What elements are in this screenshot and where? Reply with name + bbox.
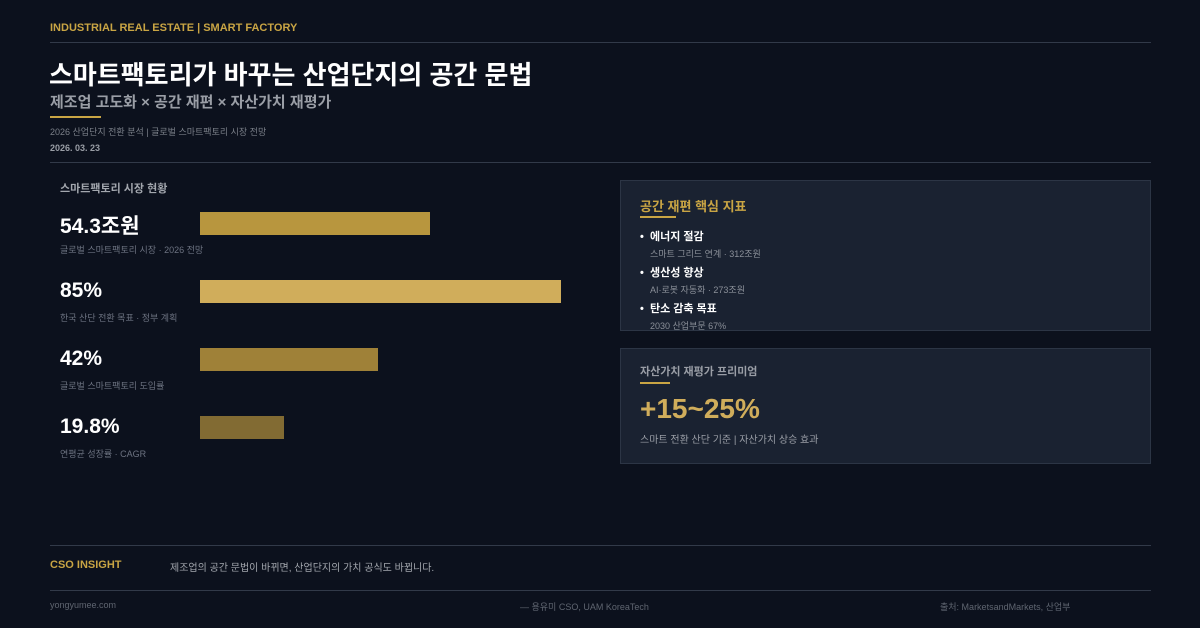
- footer: — 용유미 CSO, UAM KoreaTech: [520, 602, 649, 612]
- metric 2: 한국 산단 전환 목표 · 정부 계획: [60, 313, 177, 323]
- CSO insight: 제조업의 공간 문법이 바뀌면, 산업단지의 가치 공식도 바뀝니다.: [170, 563, 434, 574]
- kicker: INDUSTRIAL REAL ESTATE | SMART FACTORY: [50, 22, 297, 34]
- metric 3: [60, 347, 164, 391]
- metric 2: [60, 279, 177, 323]
- item: carbon: 2030 산업부문 67%: [650, 321, 726, 331]
- metric 1: [60, 215, 203, 255]
- footer: 출처: MarketsandMarkets, 산업부: [940, 602, 1070, 612]
- footer: [50, 600, 1070, 612]
- bar 1: [200, 212, 430, 235]
- item: energy: [640, 230, 761, 259]
- CSO insight: [50, 559, 434, 574]
- title: 스마트팩토리가 바꾸는 산업단지의 공간 문법: [49, 60, 532, 90]
- panel: key indicators: [620, 180, 1151, 331]
- item: productivity: AI·로봇 자동화 · 273조원: [650, 285, 745, 295]
- metric 4: 19.8%: [60, 415, 120, 438]
- meta text: 2026 산업단지 전환 분석 | 글로벌 스마트팩토리 시장 전망: [50, 127, 266, 137]
- item: carbon: [640, 302, 726, 331]
- CSO insight: CSO INSIGHT: [50, 559, 122, 571]
- metric 3: 글로벌 스마트팩토리 도입률: [60, 381, 164, 391]
- date: 2026. 03. 23: [50, 143, 100, 153]
- bar 2: [200, 280, 561, 303]
- bar 4: [200, 416, 284, 439]
- panel heading: 자산가치 재평가 프리미엄: [640, 366, 757, 378]
- chart heading: 스마트팩토리 시장 현황: [60, 183, 167, 195]
- metric 3: 42%: [60, 347, 102, 370]
- item: energy: • 에너지 절감: [640, 231, 704, 243]
- panel heading: 공간 재편 핵심 지표: [640, 199, 747, 214]
- bar 3: [200, 348, 378, 371]
- big number: +15~25%: [640, 393, 760, 424]
- item: productivity: [640, 266, 745, 295]
- subtitle: 제조업 고도화 × 공간 재편 × 자산가치 재평가: [50, 94, 331, 111]
- footer: yongyumee.com: [50, 600, 116, 610]
- caption: 스마트 전환 산단 기준 | 자산가치 상승 효과: [640, 435, 818, 446]
- metric 2: 85%: [60, 279, 102, 302]
- metric 1: 글로벌 스마트팩토리 시장 · 2026 전망: [60, 245, 203, 255]
- metric 4: [60, 415, 146, 459]
- item: productivity: • 생산성 향상: [640, 267, 704, 279]
- item: energy: 스마트 그리드 연계 · 312조원: [650, 249, 761, 259]
- item: carbon: • 탄소 감축 목표: [640, 303, 717, 315]
- metric 1: 54.3조원: [60, 215, 140, 238]
- panel: asset premium: [620, 348, 1151, 464]
- metric 4: 연평균 성장률 · CAGR: [60, 449, 146, 459]
